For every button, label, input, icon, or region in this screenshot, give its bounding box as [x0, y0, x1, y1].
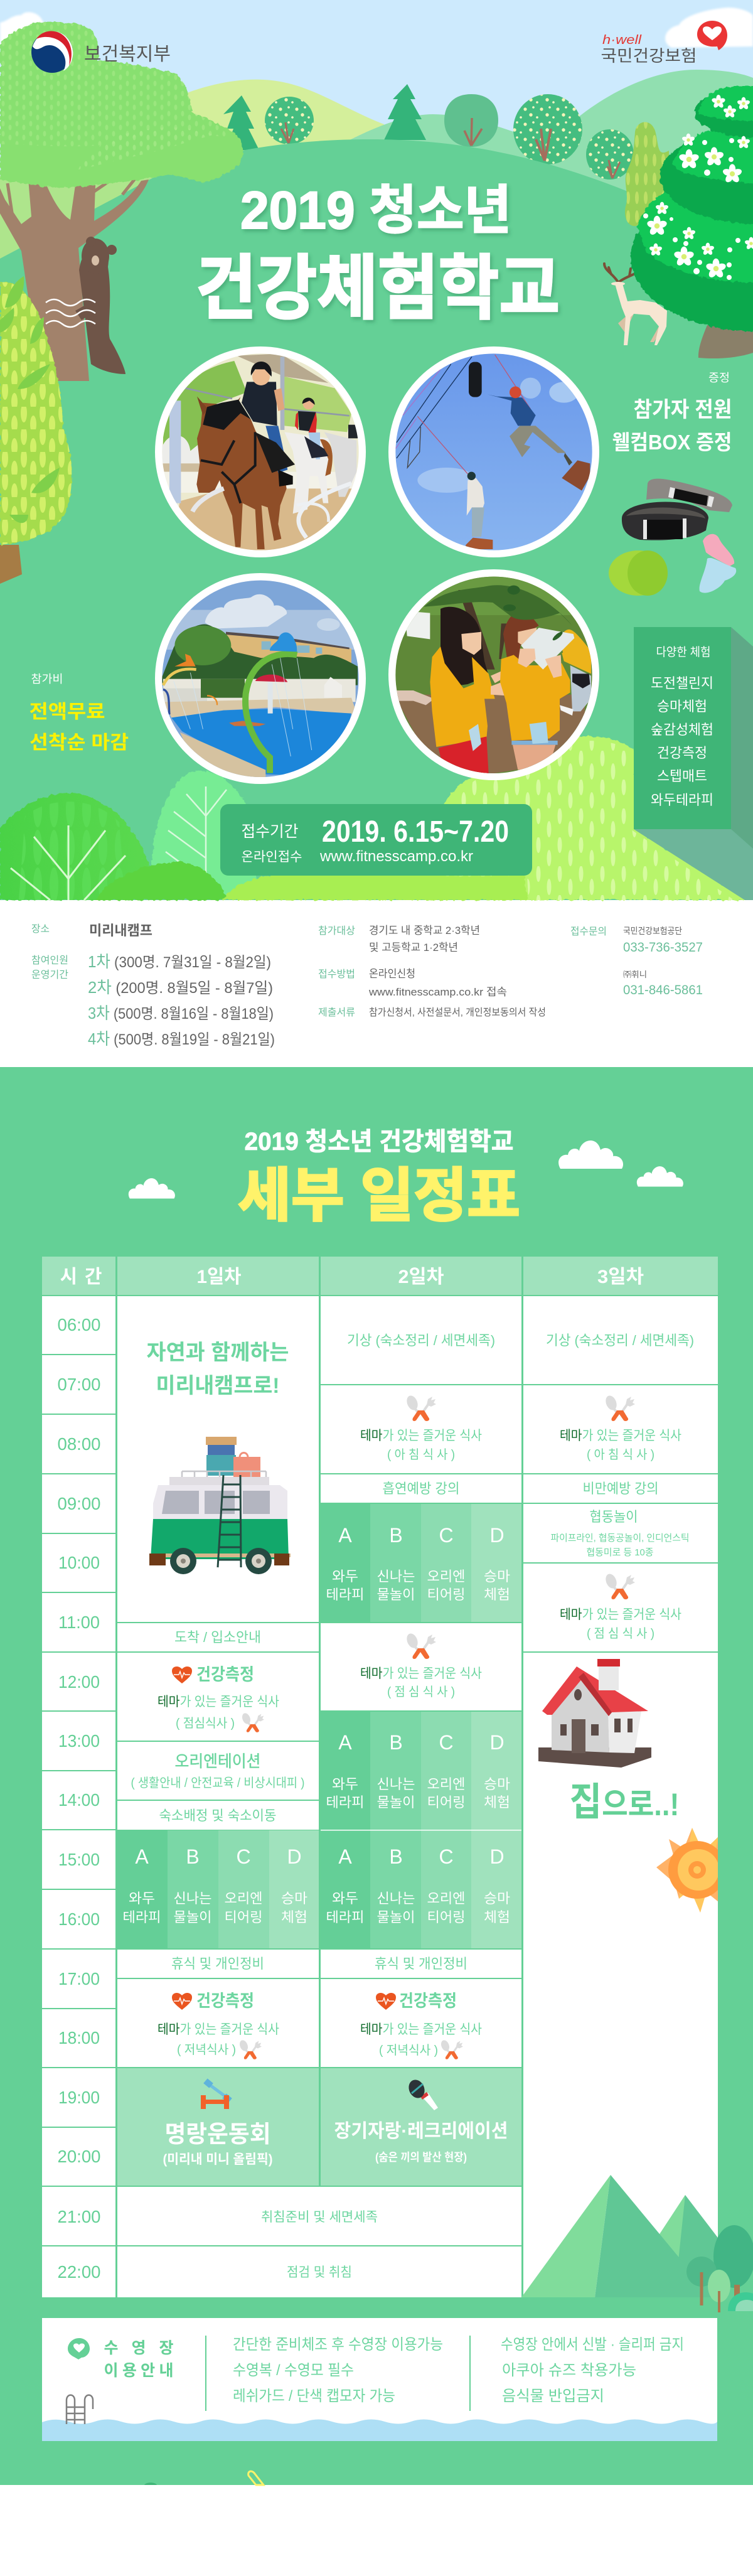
program block ABCD day 1: 승마: [281, 1891, 307, 1906]
time column: 06:00: [58, 1315, 100, 1334]
program block ABCD day 2 late afternoon: 체험: [484, 1909, 510, 1925]
icon: house: [538, 1659, 651, 1768]
schedule heading: [238, 1128, 520, 1228]
cell: wake up: [321, 1296, 521, 1384]
time column: 07:00: [58, 1375, 100, 1394]
cell: health check and dinner: 건강측정: [196, 1992, 254, 2010]
experience list: 숲감성체험: [651, 722, 713, 738]
cell: health check and lunch: 건강측정: [196, 1665, 254, 1684]
cell: arrival: 도착 / 입소안내: [174, 1629, 261, 1645]
cell: orientation: 오리엔테이션: [174, 1752, 261, 1771]
cell: lights out: 점검 및 취침: [287, 2265, 352, 2280]
program block ABCD day 2 late afternoon: 승마: [484, 1891, 510, 1906]
icon: green ball: [609, 550, 668, 596]
cell: lunch: 테마가 있는 즐거운 식사: [560, 1607, 681, 1622]
program block ABCD day 1: 오리엔: [225, 1891, 262, 1906]
participants label: [31, 955, 68, 980]
cell: orientation: ( 생활안내 / 안전교육 / 비상시대피 ): [131, 1776, 305, 1790]
program block ABCD day 2 morning: 신나는: [376, 1569, 415, 1584]
icon: big flowering tree right: [631, 87, 753, 358]
method label: 접수방법: [318, 969, 355, 980]
experience list: 도전챌린지: [651, 675, 713, 691]
cell: bedtime prep: [117, 2187, 521, 2245]
day 3 column: [523, 1296, 726, 2297]
icon: taegeuk: [31, 31, 73, 73]
program block ABCD day 1: 신나는: [173, 1891, 212, 1906]
target label: 참가대상: [318, 925, 355, 936]
experience list: 승마체험: [657, 699, 707, 714]
cell: health check and dinner: 건강측정: [399, 1992, 457, 2010]
cell: breakfast: ( 아 침 식 사 ): [587, 1447, 654, 1462]
icon: pink tape: [703, 534, 734, 566]
cell: rest: 휴식 및 개인정비: [375, 1956, 467, 1972]
pool rules column 1: [233, 2336, 443, 2405]
schedule heading: 세부 일정표: [238, 1163, 520, 1228]
icon: mountains: [521, 2175, 753, 2298]
lime hill: [176, 80, 384, 188]
pool rules column 2: 음식물 반입금지: [502, 2388, 604, 2405]
program block ABCD day 1: D: [287, 1845, 302, 1868]
sky: [0, 0, 753, 276]
icon: sun: [656, 1828, 718, 1913]
panel: pool guide: [42, 2318, 717, 2441]
table header: 시 간: [60, 1267, 102, 1287]
cell: cooperative play: [523, 1504, 718, 1562]
time column: 08:00: [58, 1434, 100, 1454]
program block ABCD day 1: 물놀이: [173, 1909, 212, 1925]
participants label: 운영기간: [31, 969, 68, 980]
cell: talent show: (숨은 끼의 발산 현장): [375, 2151, 467, 2164]
cell: sports day: [117, 2068, 319, 2186]
photo: forest experience: [384, 565, 604, 785]
program block ABCD day 2 afternoon: B: [389, 1731, 403, 1754]
icon: lower-left bush: [0, 276, 72, 584]
cell: health check and lunch: [117, 1653, 319, 1741]
icon: pool ladder: [67, 2395, 93, 2424]
cell: health check and dinner: ( 저녁식사 ): [379, 2043, 438, 2058]
target text: 경기도 내 중학교 2·3학년: [369, 925, 480, 936]
cell: breakfast: [321, 1385, 521, 1473]
panel: various experiences: [634, 627, 731, 829]
icon: speech bubble: [68, 2338, 90, 2359]
day 1 column: [117, 1296, 319, 2186]
cell: cooperative play: 협동미로 등 10종: [586, 1547, 654, 1558]
cell: rest: 휴식 및 개인정비: [171, 1956, 264, 1972]
table header: 1일차: [197, 1267, 241, 1287]
cell: health check and lunch: ( 점심식사 ): [176, 1716, 235, 1731]
cell: wake up: 기상 (숙소정리 / 세면세족): [546, 1333, 694, 1348]
experience list: 스텝매트: [657, 768, 707, 784]
photo: horse riding: [151, 342, 370, 562]
pale mid hill: [339, 114, 565, 188]
time column: 09:00: [58, 1494, 100, 1513]
inquiry contacts: 국민건강보험공단: [623, 926, 682, 936]
cell: room assignment: [117, 1801, 319, 1830]
program block ABCD day 2 morning: 오리엔: [427, 1569, 466, 1584]
bark waves: [46, 299, 95, 327]
gift caption: [612, 372, 732, 454]
period label: 접수기간: [241, 823, 299, 840]
experience list: 와두테라피: [651, 792, 713, 808]
program block ABCD day 1: A: [135, 1845, 149, 1868]
program block ABCD day 2 afternoon: A: [338, 1731, 352, 1754]
cell: arrival: [117, 1623, 319, 1651]
time column: 12:00: [58, 1672, 100, 1692]
pool rules column 2: 수영장 안에서 신발 · 슬리퍼 금지: [501, 2336, 684, 2353]
gift line 2: 웰컴BOX 증정: [612, 431, 732, 454]
table header: 3일차: [597, 1267, 644, 1287]
program block ABCD day 2 morning: 테라피: [326, 1587, 364, 1602]
cell: breakfast: ( 아 침 식 사 ): [387, 1447, 455, 1462]
fee line 2: 선착순 마감: [29, 733, 129, 753]
panel: registration period: [220, 804, 532, 876]
cell: lights out: [117, 2246, 521, 2297]
pool rules column 1: 간단한 준비체조 후 수영장 이용가능: [233, 2336, 443, 2353]
cell: health check and lunch: 테마가 있는 즐거운 식사: [158, 1695, 279, 1709]
time column: 19:00: [58, 2088, 100, 2107]
program block ABCD day 2 late afternoon: 와두: [332, 1891, 358, 1906]
program block ABCD day 1: 체험: [281, 1909, 307, 1925]
cell: lunch: [321, 1623, 521, 1710]
cell: smoking prevention: 흡연예방 강의: [383, 1481, 459, 1496]
participation fee: [29, 673, 129, 753]
target text: [369, 925, 480, 953]
program block ABCD day 2 morning: 티어링: [427, 1587, 466, 1602]
panel heading: 다양한 체험: [656, 645, 710, 659]
session list: 4차 (500명. 8월19일 - 8월21일): [88, 1029, 275, 1048]
schedule heading: 2019 청소년 건강체험학교: [245, 1128, 513, 1156]
icon: camper van: [149, 1437, 291, 1574]
inquiry contacts: ㈜휘니: [623, 970, 647, 979]
title: [196, 181, 560, 328]
program block ABCD day 2 afternoon: 와두: [332, 1776, 358, 1792]
logo: ministry of health: [31, 31, 171, 73]
cell: talent show: [321, 2068, 521, 2186]
program block ABCD day 2 afternoon: 티어링: [427, 1795, 466, 1810]
program block ABCD day 1: 와두: [129, 1891, 155, 1906]
program block ABCD day 2 afternoon: 승마: [484, 1776, 510, 1792]
program block ABCD day 2 late afternoon: B: [389, 1845, 403, 1868]
participants label: 참여인원: [31, 955, 68, 966]
cell: cooperative play: 협동놀이: [590, 1509, 638, 1525]
website: www.fitnesscamp.co.kr: [319, 848, 473, 865]
icon: pale tree: [151, 771, 257, 900]
time column: 15:00: [58, 1850, 100, 1869]
panel: schedule section: [0, 1128, 753, 2485]
icon: clouds: [129, 1140, 683, 1199]
icon: deer: [604, 264, 667, 345]
cell: cooperative play: 파이프라인, 협동공놀이, 인디언스틱: [551, 1533, 689, 1543]
cell: breakfast: 테마가 있는 즐거운 식사: [360, 1429, 482, 1443]
cell: lunch: [523, 1564, 718, 1651]
organisation name: 국민건강보험: [601, 46, 697, 65]
light hill behind tree: [0, 176, 157, 259]
program block ABCD day 2 late afternoon: 오리엔: [427, 1891, 466, 1906]
title line 1: 2019 청소년: [240, 181, 511, 240]
icon: dumbbells: [201, 2078, 232, 2109]
program block ABCD day 2 afternoon: 체험: [484, 1795, 510, 1810]
time column: 17:00: [58, 1969, 100, 1988]
cell: breakfast: 테마가 있는 즐거운 식사: [560, 1429, 681, 1443]
pool rules column 2: 아쿠아 슈즈 착용가능: [502, 2362, 636, 2379]
time column: 22:00: [58, 2262, 100, 2282]
icon: welcome box goods: [609, 479, 736, 596]
session list: 1차 (300명. 7월31일 - 8월2일): [88, 952, 271, 971]
pool heading: 수 영 장: [104, 2339, 173, 2357]
cell: camp intro: 자연과 함께하는: [147, 1341, 289, 1365]
pool rules column 1: 레쉬가드 / 단색 캡모자 가능: [233, 2388, 395, 2405]
cell: wake up: [523, 1296, 718, 1384]
cell: bedtime prep: 취침준비 및 세면세족: [261, 2210, 378, 2224]
cell: going home: [523, 1653, 726, 2297]
water: [42, 2419, 717, 2441]
program block ABCD day 2 afternoon: 신나는: [376, 1776, 415, 1792]
panel: hero illustration: [0, 0, 753, 900]
cell: sports day: 명랑운동회: [164, 2122, 271, 2148]
cell: obesity prevention: 비만예방 강의: [582, 1481, 659, 1496]
table header: 2일차: [398, 1267, 444, 1287]
program block ABCD day 2 late afternoon: C: [439, 1845, 454, 1868]
program block ABCD day 1: 티어링: [225, 1909, 262, 1925]
program block ABCD day 1: [117, 1830, 319, 1948]
inquiry label: 접수문의: [570, 926, 607, 937]
icon: bear: [75, 237, 125, 374]
program block ABCD day 2 morning: 와두: [332, 1569, 358, 1584]
time column: 10:00: [58, 1553, 100, 1572]
cell: health check and dinner: 테마가 있는 즐거운 식사: [158, 2022, 279, 2037]
gift line 1: 참가자 전원: [634, 398, 732, 422]
icon: right cloud: [665, 8, 753, 48]
pool rules column 2: [501, 2336, 684, 2405]
cell: camp intro: [117, 1296, 319, 1622]
title line 2: 건강체험학교: [196, 249, 560, 328]
icon: small and centre bushes: [96, 862, 565, 900]
inquiry contacts: 031-846-5861: [623, 983, 703, 997]
program block ABCD day 2 late afternoon: 티어링: [427, 1909, 466, 1925]
photo: water park: [151, 568, 370, 788]
floor shadow of box: [634, 829, 753, 900]
fee label: 참가비: [31, 673, 63, 685]
pool rules column 1: 수영복 / 수영모 필수: [233, 2362, 354, 2379]
main green hill: [0, 139, 753, 900]
fee line 1: 전액무료: [29, 702, 105, 722]
icon: background trees: [223, 84, 634, 180]
method text: [368, 968, 507, 998]
icon: microphone: [406, 2077, 438, 2110]
day 2 column: [117, 1296, 521, 2297]
program block ABCD day 1: C: [236, 1845, 251, 1868]
program block ABCD day 2 late afternoon: A: [338, 1845, 352, 1868]
period dates: 2019. 6.15~7.20: [322, 815, 509, 849]
logo: national health insurance: [601, 21, 727, 65]
panel: event information: [31, 923, 703, 1048]
icon: blue foot: [700, 558, 736, 593]
icon: small trees: [686, 2225, 753, 2312]
session list: [88, 952, 275, 1048]
icon: bottom yellow float: [248, 2471, 264, 2485]
icon: red heart badge: [697, 21, 727, 50]
side of box: [731, 627, 753, 849]
photo: high ropes: [384, 342, 604, 562]
cell: lunch: 테마가 있는 즐거운 식사: [360, 1666, 482, 1681]
cell: health check and dinner: [117, 1979, 319, 2067]
cell: health check and dinner: 테마가 있는 즐거운 식사: [360, 2022, 482, 2037]
program block ABCD day 2 morning: A: [338, 1524, 352, 1547]
method text: www.fitnesscamp.co.kr 접속: [368, 986, 507, 998]
online label: 온라인접수: [241, 850, 302, 864]
cell: breakfast: [523, 1385, 718, 1473]
going home text: 집으로..!: [570, 1781, 679, 1824]
time column: 20:00: [58, 2147, 100, 2166]
time column: 14:00: [58, 1790, 100, 1810]
program block ABCD day 2 late afternoon: 신나는: [376, 1891, 415, 1906]
ministry name: 보건복지부: [84, 44, 171, 65]
session list: 2차 (200명. 8월5일 - 8월7일): [88, 978, 273, 997]
icon: right bottom bush: [444, 736, 747, 900]
program block ABCD day 2 morning: B: [389, 1524, 403, 1547]
cell: orientation: [117, 1742, 319, 1800]
panel: schedule section background: [0, 1067, 753, 1230]
mint right hill: [565, 70, 753, 264]
cell: camp intro: 미리내캠프로!: [156, 1374, 280, 1398]
program block ABCD day 2 late afternoon: 테라피: [326, 1909, 364, 1925]
venue name: 미리내캠프: [89, 923, 152, 938]
gift label: 증정: [708, 372, 730, 384]
icon: left cloud: [0, 12, 43, 48]
program block ABCD day 2 late afternoon: [321, 1830, 521, 1948]
time column: 21:00: [58, 2207, 100, 2226]
time column: [42, 1296, 115, 2297]
program block ABCD day 2 late afternoon: 물놀이: [376, 1909, 415, 1925]
cell: wake up: 기상 (숙소정리 / 세면세족): [347, 1333, 495, 1348]
documents text: 참가신청서, 사전설문서, 개인정보동의서 작성: [369, 1007, 546, 1018]
program block ABCD day 2 morning: 물놀이: [376, 1587, 415, 1602]
program block ABCD day 2 late afternoon: D: [489, 1845, 505, 1868]
program block ABCD day 2 afternoon: [321, 1712, 521, 1830]
cell: rest: [117, 1950, 319, 1978]
program block ABCD day 2 morning: D: [489, 1524, 505, 1547]
method text: 온라인신청: [369, 968, 415, 980]
program block ABCD day 2 afternoon: 물놀이: [376, 1795, 415, 1810]
icon: wristband: [622, 479, 732, 540]
inquiry contacts: 033-736-3527: [623, 940, 703, 955]
target text: 및 고등학교 1·2학년: [369, 942, 458, 953]
cell: room assignment: 숙소배정 및 숙소이동: [159, 1808, 276, 1823]
cell: lunch: ( 점 심 식 사 ): [387, 1685, 455, 1699]
cell: talent show: 장기자랑·레크리에이션: [334, 2121, 508, 2142]
time column: 11:00: [58, 1613, 100, 1632]
program block ABCD day 2 morning: 체험: [484, 1587, 510, 1602]
icon: big left tree: [0, 22, 243, 381]
icon: bottom dome: [144, 2482, 157, 2485]
program block ABCD day 2 afternoon: 오리엔: [427, 1776, 466, 1792]
venue label: 장소: [31, 923, 50, 935]
pool heading: [104, 2339, 173, 2380]
inquiry contacts: [623, 926, 703, 997]
session list: 3차 (500명. 8월16일 - 8월18일): [88, 1004, 274, 1022]
program block ABCD day 2 morning: 승마: [484, 1569, 510, 1584]
time column: 18:00: [58, 2028, 100, 2047]
program block ABCD day 2 afternoon: D: [489, 1731, 505, 1754]
table header: [42, 1257, 718, 1295]
program block ABCD day 1: 테라피: [123, 1909, 161, 1925]
cell: smoking prevention: [321, 1474, 521, 1503]
experience list: [651, 675, 713, 808]
program block ABCD day 2 afternoon: 테라피: [326, 1795, 364, 1810]
icon: tall yellow-green tree: [625, 122, 669, 226]
program block ABCD day 2 afternoon: C: [439, 1731, 454, 1754]
cell: sports day: (미리내 미니 올림픽): [163, 2152, 272, 2167]
cell: health check and dinner: ( 저녁식사 ): [177, 2042, 236, 2057]
icon: bottom left bush: [0, 793, 157, 900]
cell: rest: [321, 1950, 521, 1978]
cell: obesity prevention: [523, 1474, 718, 1503]
cell: lunch: ( 점 심 식 사 ): [587, 1626, 654, 1641]
experience list: 건강측정: [657, 745, 707, 761]
program block ABCD day 2 morning: C: [439, 1524, 454, 1547]
time column: 16:00: [58, 1909, 100, 1929]
program block ABCD day 2 morning: [321, 1504, 521, 1622]
h-well tagline: h·well: [602, 33, 642, 47]
time column: 13:00: [58, 1731, 100, 1751]
program block ABCD day 1: B: [186, 1845, 200, 1868]
cell: health check and dinner: [321, 1979, 521, 2067]
pool heading: 이 용 안 내: [104, 2362, 173, 2380]
documents label: 제출서류: [318, 1007, 355, 1018]
